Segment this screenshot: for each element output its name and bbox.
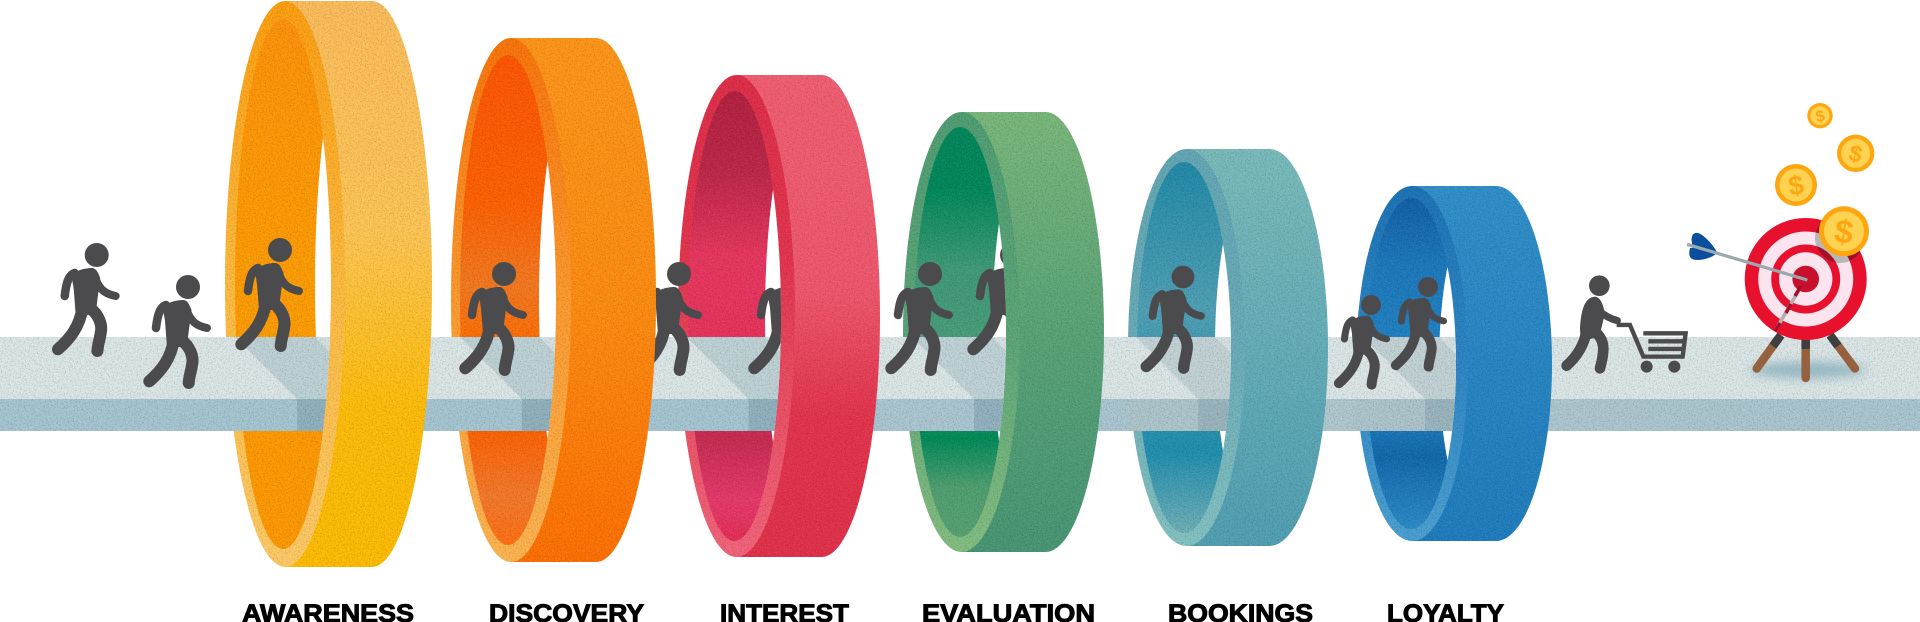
person: walking first [58,243,116,351]
icon: coin middle [1775,164,1817,206]
person: loyalty front [1339,295,1387,385]
icon: coin middle: $ [1787,170,1806,201]
icon: coin upper right: $ [1846,139,1865,168]
person: discovery [465,262,523,370]
person: evaluation front [891,262,949,370]
target shadow on bridge [1750,362,1866,378]
person: loyalty rear [1396,277,1444,367]
icon: bullseye target [1745,213,1867,340]
icon: coin upper right [1837,135,1874,172]
icon: coin on target [1819,206,1869,256]
icon: target legs [1757,335,1855,378]
icon: arrow in bullseye [1687,233,1807,280]
ring: loyalty [1339,186,1552,541]
person: interest front [640,262,698,370]
ring: discovery [440,38,656,562]
ring: interest [640,75,880,557]
person: walking second [149,275,207,383]
ring: bookings [1120,149,1328,546]
ring: awareness [220,1,432,567]
person: interest rear, clipped by rim [748,288,781,374]
icon: coin on target: $ [1832,212,1856,251]
person pushing shopping cart [1567,275,1686,373]
icon: shopping cart [1617,325,1686,373]
person: evaluation rear, clipped by rim [967,248,1006,356]
ring: evaluation [880,112,1104,552]
person: bookings [1146,266,1201,368]
walkway bridge [0,337,1920,431]
icon: coin small: $ [1814,108,1826,126]
person: awareness [241,238,299,346]
icon: coin small [1807,103,1833,128]
